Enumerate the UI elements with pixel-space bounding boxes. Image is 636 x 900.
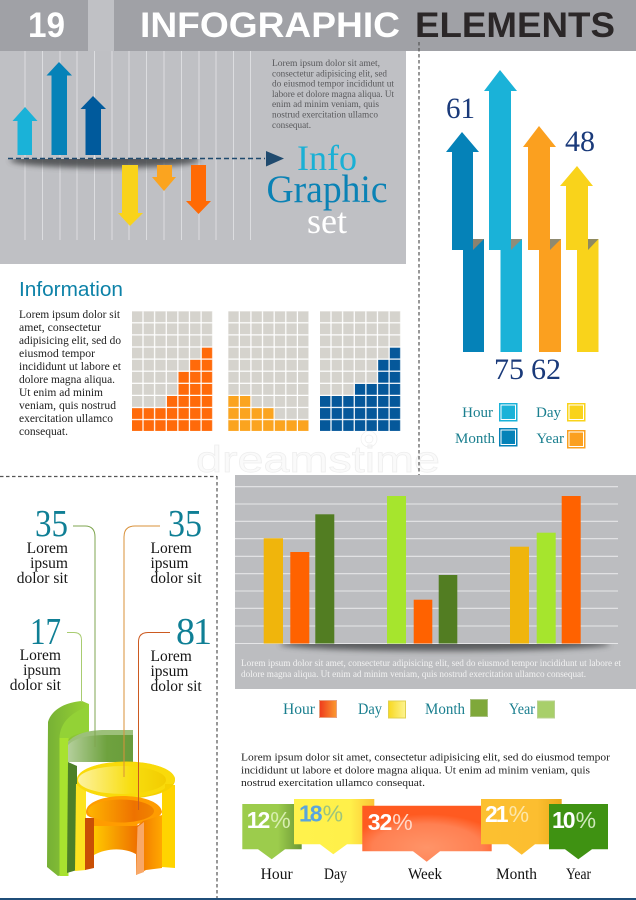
- tag: day 18%: 18%: [299, 801, 343, 827]
- tag labels: [261, 866, 592, 883]
- bar chart caption: dolore magna aliqua. Ut enim ad minim veniam, quis nostrud exercitation ullamco consequat.: [241, 669, 586, 679]
- arrows up: [12, 62, 106, 155]
- bar chart caption: [241, 658, 622, 679]
- callout labels: ipsum: [150, 555, 188, 572]
- tag: week 32%: 32%: [368, 809, 413, 835]
- callout values: 35: [168, 503, 202, 545]
- bottom paragraph: incididunt ut labore et dolore magna aliqua. Ut enim ad minim veniam, quis: [241, 764, 590, 776]
- arrow values: 48: [565, 125, 595, 158]
- callout labels: ipsum: [150, 663, 188, 680]
- cylinder: outer green segment: [47, 701, 89, 876]
- information paragraph: dolore magna aliqua.: [19, 374, 115, 386]
- callout labels: dolor sit: [17, 570, 69, 587]
- panel paragraph: [272, 58, 394, 130]
- panel paragraph: consectetur adipisicing elit, sed: [272, 68, 387, 78]
- baseline shadow: [278, 644, 612, 655]
- panel paragraph: nostrud exercitation ullamco: [272, 110, 378, 120]
- arrow values: 75: [494, 353, 524, 386]
- arrow 61: [446, 132, 484, 352]
- callout labels: dolor sit: [150, 570, 202, 587]
- grid chart: blue: [320, 311, 401, 431]
- legend: bar chart: Day: [358, 701, 382, 718]
- grid chart: orange: [132, 311, 213, 431]
- cylinder: yellow ring: [75, 762, 175, 871]
- information paragraph: eiusmod tempor: [19, 348, 95, 360]
- information paragraph: Ut enim ad minim: [19, 387, 103, 399]
- bars group 3: [510, 496, 581, 644]
- legend: arrows: Month: [455, 431, 495, 447]
- arrow values: 62: [531, 353, 561, 386]
- panel: bar chart: [235, 475, 636, 689]
- information paragraph: [19, 309, 122, 438]
- arrow 75: [484, 70, 522, 352]
- tag: hour 12%: [242, 804, 302, 859]
- info graphic set wordmark: Graphic: [266, 168, 388, 211]
- chart: 3D cylinder with callouts: [10, 503, 212, 876]
- tag: month 21%: 21%: [485, 801, 529, 827]
- bars group 2: [387, 496, 457, 644]
- callout labels: dolor sit: [10, 677, 62, 694]
- dashed axis with arrowhead: [8, 151, 284, 166]
- header bar: [0, 0, 636, 51]
- arrows down: [118, 165, 211, 226]
- information paragraph: amet, consectetur: [19, 322, 101, 334]
- header bar: INFOGRAPHIC: [140, 6, 400, 45]
- tag labels: Week: [408, 866, 442, 883]
- information paragraph: adipisicing elit, sed do: [19, 335, 121, 347]
- callout labels: Lorem: [27, 540, 68, 557]
- information paragraph: exercitation ullamco: [19, 413, 113, 425]
- bars group 1: [264, 514, 334, 644]
- chart: folded arrows: [446, 70, 598, 386]
- panel paragraph: Lorem ipsum dolor sit amet,: [272, 58, 380, 68]
- header bar: 19: [28, 6, 65, 45]
- watermark: dreamstime: [196, 439, 440, 480]
- arrow values: [446, 92, 595, 386]
- information paragraph: incididunt ut labore et: [19, 361, 122, 373]
- callout labels: dolor sit: [150, 678, 202, 695]
- legend: bar chart: Year: [509, 701, 536, 718]
- information paragraph: Lorem ipsum dolor sit: [19, 309, 121, 321]
- percentage tags: [242, 799, 608, 883]
- panel: top arrows: [0, 51, 406, 264]
- bar chart caption: Lorem ipsum dolor sit amet, consectetur adipisicing elit, sed do eiusmod tempor incididunt ut labore et: [241, 658, 622, 668]
- information paragraph: veniam, quis nostrud: [19, 400, 116, 412]
- panel paragraph: do eiusmod tempor incididunt ut: [272, 79, 394, 89]
- legend: bar chart: [283, 700, 554, 718]
- tag: week 32%: [362, 806, 492, 862]
- arrow 62: [523, 126, 561, 352]
- information heading: Information: [19, 278, 123, 301]
- callout labels: [10, 540, 202, 695]
- grid chart: amber: [228, 311, 309, 431]
- callout labels: Lorem: [150, 648, 192, 665]
- callout labels: ipsum: [30, 555, 68, 572]
- tag: month 21%: [481, 799, 562, 855]
- cylinder: middle green segment: [67, 730, 133, 873]
- bottom paragraph: Lorem ipsum dolor sit amet, consectetur adipisicing elit, sed do eiusmod tempor: [241, 752, 610, 764]
- panel paragraph: consequat.: [272, 120, 311, 130]
- watermark: [196, 431, 440, 480]
- arrow values: 61: [446, 92, 475, 125]
- callout labels: Lorem: [20, 647, 61, 664]
- callout values: 17: [30, 611, 61, 653]
- tag labels: Hour: [261, 866, 294, 883]
- legend: arrows: Day: [536, 405, 561, 421]
- tag labels: Day: [324, 866, 347, 883]
- legend: bar chart: Month: [425, 701, 465, 718]
- callout values: 81: [176, 611, 212, 653]
- leader lines: [67, 526, 170, 810]
- tag: day 18%: [294, 799, 374, 854]
- bottom paragraph: nostrud exercitation ullamco consequat.: [241, 777, 425, 789]
- cylinder: orange ring: [85, 796, 162, 875]
- dashed dividers: [0, 42, 419, 898]
- info graphic set wordmark: [266, 138, 388, 241]
- callout labels: Lorem: [150, 540, 192, 557]
- tag: year 10%: 10%: [552, 807, 596, 833]
- tag: year 10%: [549, 804, 608, 859]
- legend: arrows: Year: [536, 431, 564, 447]
- bottom rule: [0, 898, 636, 900]
- tag: hour 12%: 12%: [247, 807, 291, 833]
- shadow under dashed axis: [8, 159, 202, 172]
- callout values: [30, 503, 212, 653]
- arrow 48: [560, 166, 598, 352]
- callout labels: ipsum: [23, 662, 61, 679]
- header bar: ELEMENTS: [415, 6, 615, 45]
- info graphic set wordmark: set: [307, 201, 347, 241]
- tag labels: Month: [496, 866, 537, 883]
- legend: arrows: [455, 404, 585, 448]
- legend: bar chart: Hour: [283, 701, 316, 718]
- information paragraph: consequat.: [19, 426, 68, 438]
- panel paragraph: enim ad minim veniam, quis: [272, 99, 379, 109]
- callout values: 35: [35, 503, 68, 545]
- tag labels: Year: [566, 866, 592, 883]
- legend: arrows: Hour: [462, 405, 493, 421]
- info graphic set wordmark: Info: [297, 138, 357, 178]
- panel paragraph: labore et dolore magna aliqua. Ut: [272, 89, 394, 99]
- bottom paragraph: [241, 752, 610, 789]
